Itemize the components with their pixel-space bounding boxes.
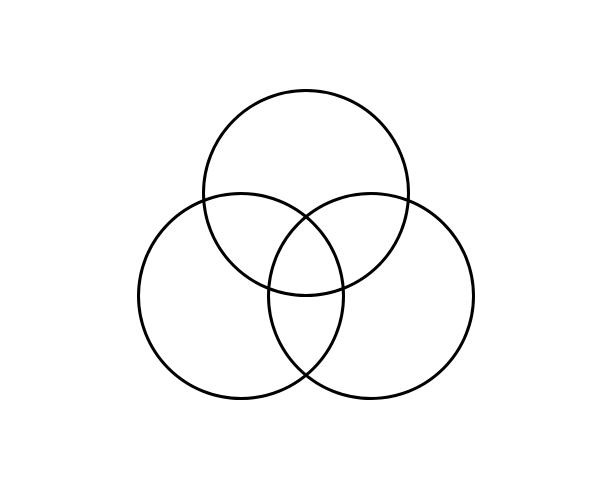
circle: top [204, 90, 408, 296]
circle: bottom left [138, 194, 344, 398]
circle: bottom right [268, 194, 474, 398]
